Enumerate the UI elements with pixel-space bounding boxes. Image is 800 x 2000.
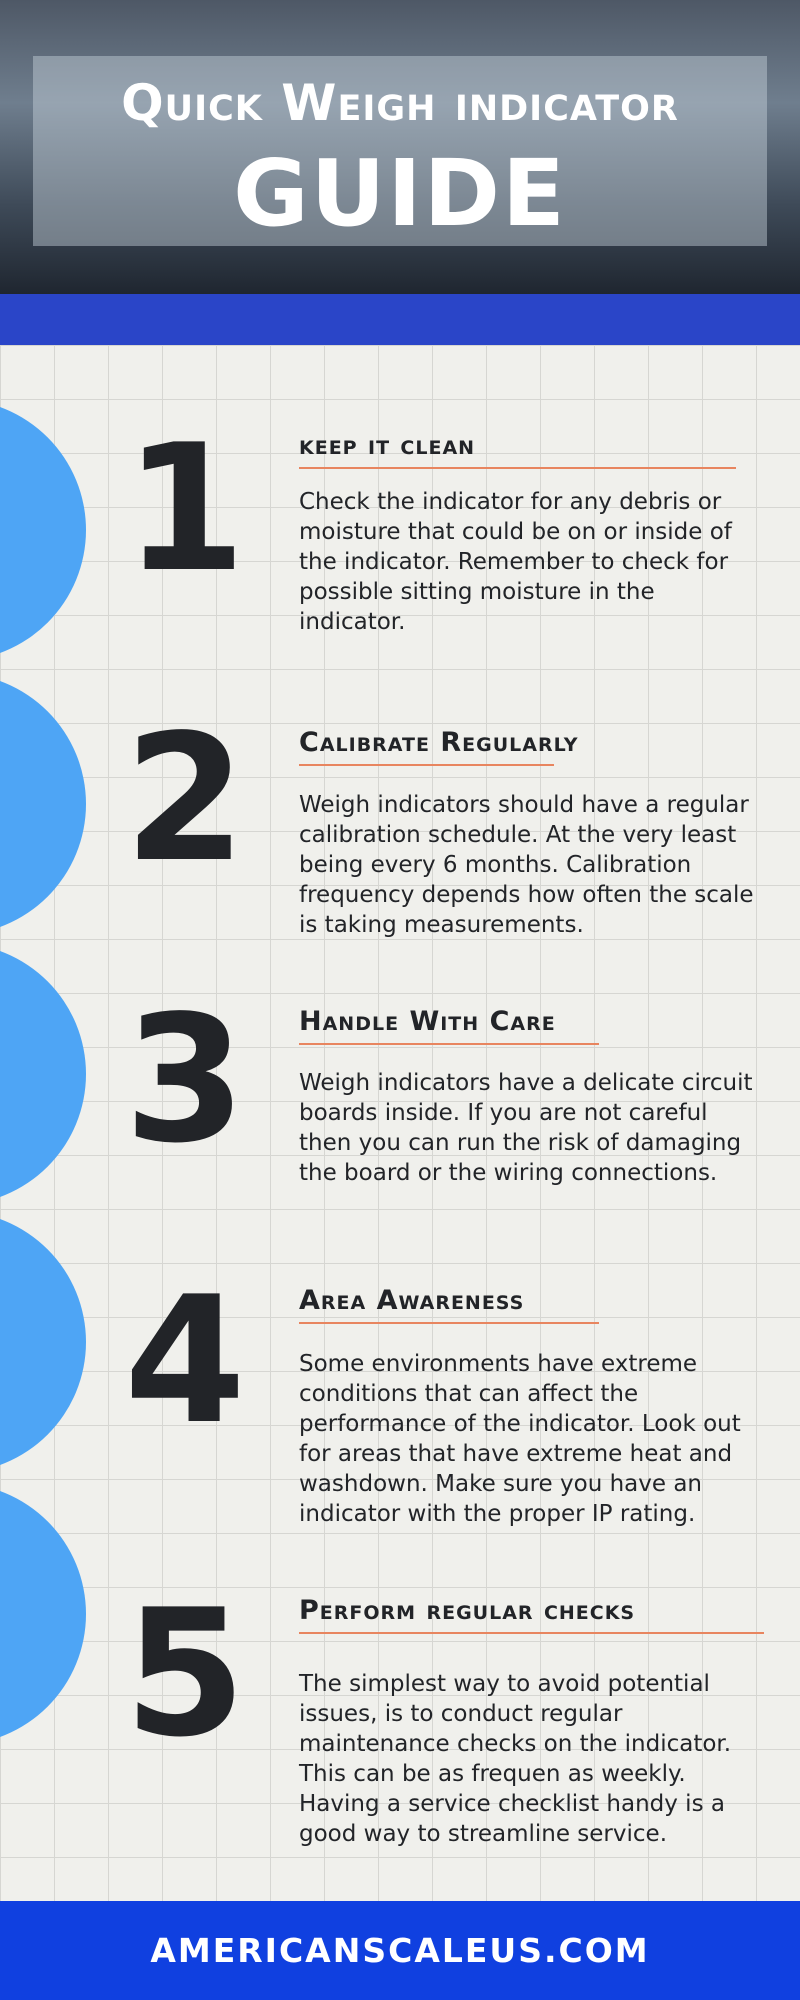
step 4 text: Some environments have extreme conditions that can affect the performance of the indicator. Look out for areas that have extreme heat and washdown. Make sure you have an indicator with the proper IP rating. xyxy=(299,1351,741,1527)
step 5 text: The simplest way to avoid potential issues, is to conduct regular maintenance checks on the indicator. This can be as frequen as weekly. Having a service checklist handy is a good way to streamline service. xyxy=(299,1671,731,1847)
step 4 heading: Area Awareness xyxy=(299,1285,524,1316)
title line 2: GUIDE xyxy=(233,140,567,247)
step 1 heading xyxy=(299,430,736,469)
step 3 heading xyxy=(299,1006,599,1045)
step 5 number: 5 xyxy=(124,1573,246,1776)
step 1 text: Check the indicator for any debris or moisture that could be on or inside of the indicator. Remember to check for possible sitting moisture in the indicator. xyxy=(299,489,732,635)
step 4 heading xyxy=(299,1285,599,1324)
step 2 text: Weigh indicators should have a regular calibration schedule. At the very least being every 6 months. Calibration frequency depends how often the scale is taking measurements. xyxy=(299,792,754,938)
step 5 heading: Perform regular checks xyxy=(299,1595,635,1626)
step 5 heading xyxy=(299,1595,764,1634)
title box xyxy=(33,56,767,246)
step 2 number: 2 xyxy=(124,698,246,901)
circles xyxy=(0,407,86,1737)
header photo background xyxy=(0,0,800,294)
step 1 heading: keep it clean xyxy=(299,430,475,461)
footer xyxy=(0,1901,800,2000)
footer url: AMERICANSCALEUS.COM xyxy=(150,1931,650,1970)
step 4 number: 4 xyxy=(124,1260,246,1463)
step 1 number: 1 xyxy=(124,408,246,611)
title line 1: Quick Weigh indicator xyxy=(121,74,679,132)
step 3 text: Weigh indicators have a delicate circuit boards inside. If you are not careful then you can run the risk of damaging the board or the wiring connections. xyxy=(299,1070,752,1186)
blue bar xyxy=(0,294,800,345)
step 3 number: 3 xyxy=(124,979,246,1182)
step 3 heading: Handle With Care xyxy=(299,1006,556,1037)
step 2 heading: Calibrate Regularly xyxy=(299,727,579,758)
